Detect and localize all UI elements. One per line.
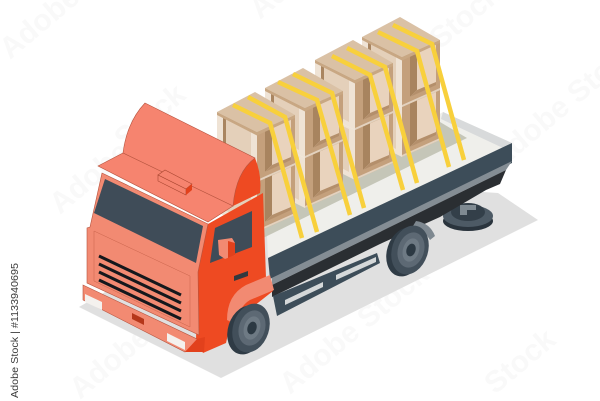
watermark: Stock [108, 77, 192, 155]
rear wheel [380, 221, 435, 281]
stock id side text: Adobe Stock | #1133940695 [9, 263, 21, 398]
windshield [94, 179, 203, 263]
side skirt [273, 253, 380, 316]
bumper side [185, 337, 205, 352]
door handle [234, 271, 248, 281]
yellow straps [233, 25, 464, 238]
bumper [83, 285, 197, 352]
cab [83, 103, 274, 353]
bumper vent [132, 313, 144, 325]
bed side panel [268, 143, 512, 279]
chassis rail [272, 170, 506, 297]
sun visor [98, 153, 233, 222]
bed deck [266, 112, 512, 258]
watermark: Adobe [43, 135, 136, 220]
roof vent [158, 170, 192, 195]
side mirror [218, 238, 235, 259]
flatbed [262, 112, 512, 316]
watermark: Stock [478, 322, 562, 400]
spare wheel [443, 203, 493, 231]
watermark: Adobe Stock [273, 257, 435, 400]
crates [217, 17, 440, 232]
side window [210, 211, 252, 263]
bed side trim [272, 161, 512, 285]
crate stack 1 [217, 92, 295, 232]
front panel [94, 231, 190, 327]
wheel arch [227, 275, 274, 325]
crate stack 2 [265, 68, 343, 208]
cab rear fairing [233, 158, 260, 206]
bed rear rim [441, 112, 512, 148]
roof [123, 103, 255, 206]
cab side [196, 193, 273, 353]
grille [99, 256, 181, 319]
crate stack 4 [362, 17, 440, 157]
crate stack 3 [315, 40, 393, 180]
left headlight [85, 294, 102, 310]
right headlight [167, 333, 185, 350]
front wheel [221, 299, 276, 359]
ground shadow [79, 180, 538, 378]
crate shadow on deck [262, 122, 467, 238]
cab front [87, 173, 208, 335]
